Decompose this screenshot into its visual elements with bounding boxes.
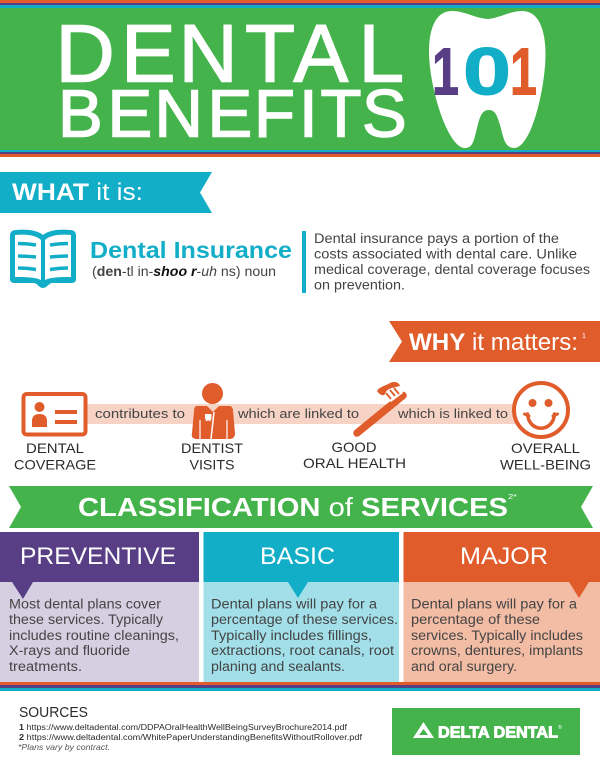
label: dental coverage: COVERAGE (14, 456, 96, 472)
text block: basic (211, 596, 398, 674)
banner: what it is: WHAT it is: (12, 179, 143, 206)
icon: tooth with 101: 1 (510, 34, 537, 110)
text block: definition (314, 231, 590, 292)
label: good oral health: ORAL HEALTH (303, 455, 406, 471)
text block: sources: 1 https://www.deltadental.com/DDPAOralHealthWellBeingSurveyBrochure2014.pdf (19, 723, 348, 732)
banner: why it matters (389, 321, 600, 362)
text block: major: percentage of these (411, 612, 540, 627)
connector band (87, 404, 517, 424)
banner: why it matters: 1 (582, 333, 586, 340)
label: overall well-being: OVERALL (511, 440, 580, 456)
text block: definition: on prevention. (314, 278, 405, 292)
text block: basic: extractions, root canals, root (211, 643, 394, 658)
label: good oral health: GOOD (332, 439, 376, 455)
footer stripes (0, 682, 600, 691)
label: dental coverage (14, 440, 96, 472)
text block: preventive: Most dental plans cover (9, 596, 162, 612)
banner: classification of services: CLASSIFICATION of SERVICES (78, 492, 508, 522)
text block: sources: SOURCES (19, 704, 88, 721)
flow chain: why it matters (14, 382, 591, 472)
logo: delta dental: DELTA DENTAL (438, 724, 558, 742)
header panel (0, 0, 600, 157)
label: good oral health (303, 439, 406, 471)
text block: preventive: treatments. (9, 659, 82, 674)
text block: basic: planing and sealants. (211, 659, 345, 674)
text block: definition: costs associated with dental care. Unlike (314, 246, 577, 262)
connector label: which is linked to: which is linked to (397, 406, 508, 421)
panel: major (404, 532, 600, 682)
banner: what it is (0, 172, 212, 213)
heading: basic: BASIC (260, 543, 335, 570)
icon: tooth with 101 (429, 11, 546, 148)
label: overall well-being: WELL-BEING (500, 456, 591, 472)
text block: preventive (9, 596, 179, 674)
panel: basic (204, 532, 399, 682)
title: BENEFITS (58, 76, 407, 152)
text block: definition: Dental insurance pays a portion of the (314, 231, 559, 246)
text block: basic: Typically includes fillings, (211, 628, 372, 643)
icon: tooth with 101: 0 (463, 34, 511, 110)
icon: open book (10, 230, 76, 288)
text block: preventive: X-rays and fluoride (9, 643, 130, 658)
title: DENTAL (56, 8, 404, 100)
panel: preventive (0, 532, 199, 682)
text block: major: Dental plans will pay for a (411, 596, 578, 612)
text block: major: and oral surgery. (411, 659, 517, 674)
banner: why it matters: WHY it matters: (409, 329, 578, 356)
text block: sources (18, 704, 363, 752)
label: overall well-being (500, 440, 591, 472)
label: dentist visits: VISITS (190, 456, 234, 472)
connector label: contributes to: contributes to (95, 406, 185, 421)
logo: delta dental (392, 708, 580, 755)
text block: major: crowns, dentures, implants (411, 643, 583, 658)
banner: classification of services (9, 486, 593, 528)
label: dental coverage: DENTAL (26, 440, 84, 456)
icon: smiley face (514, 383, 568, 437)
text block: preventive: includes routine cleanings, (9, 628, 179, 643)
text block: basic: Dental plans will pay for a (211, 596, 378, 612)
title (56, 8, 407, 152)
divider bar (302, 231, 306, 293)
heading: dental insurance definition: (den-tl in-shoo r-uh ns) noun (92, 264, 276, 279)
logo: delta dental: ® (558, 724, 562, 731)
label: dentist visits (181, 440, 243, 472)
text block: sources: 2 https://www.deltadental.com/WhitePaperUnderstandingBenefitsWithoutRollover.pdf (19, 733, 363, 742)
text block: major (411, 596, 583, 674)
text block: sources: *Plans vary by contract. (18, 743, 110, 752)
heading: dental insurance definition (90, 237, 292, 279)
heading: major: MAJOR (460, 543, 548, 570)
icon: dentist (192, 383, 235, 439)
banner: classification of services: 2* (508, 494, 517, 501)
heading: preventive: PREVENTIVE (20, 543, 176, 570)
icon: insurance card (24, 394, 86, 434)
text block: major: services. Typically includes (411, 628, 583, 643)
icon: tooth with 101: 1 (432, 34, 459, 110)
label: dentist visits: DENTIST (181, 440, 243, 456)
text block: definition: medical coverage, dental coverage focuses (314, 262, 590, 277)
heading: dental insurance definition: Dental Insurance (90, 237, 292, 263)
text block: basic: percentage of these services. (211, 612, 398, 627)
text block: preventive: these services. Typically (9, 612, 163, 627)
icon: toothbrush (357, 382, 403, 433)
connector label: which are linked to: which are linked to (237, 406, 359, 421)
